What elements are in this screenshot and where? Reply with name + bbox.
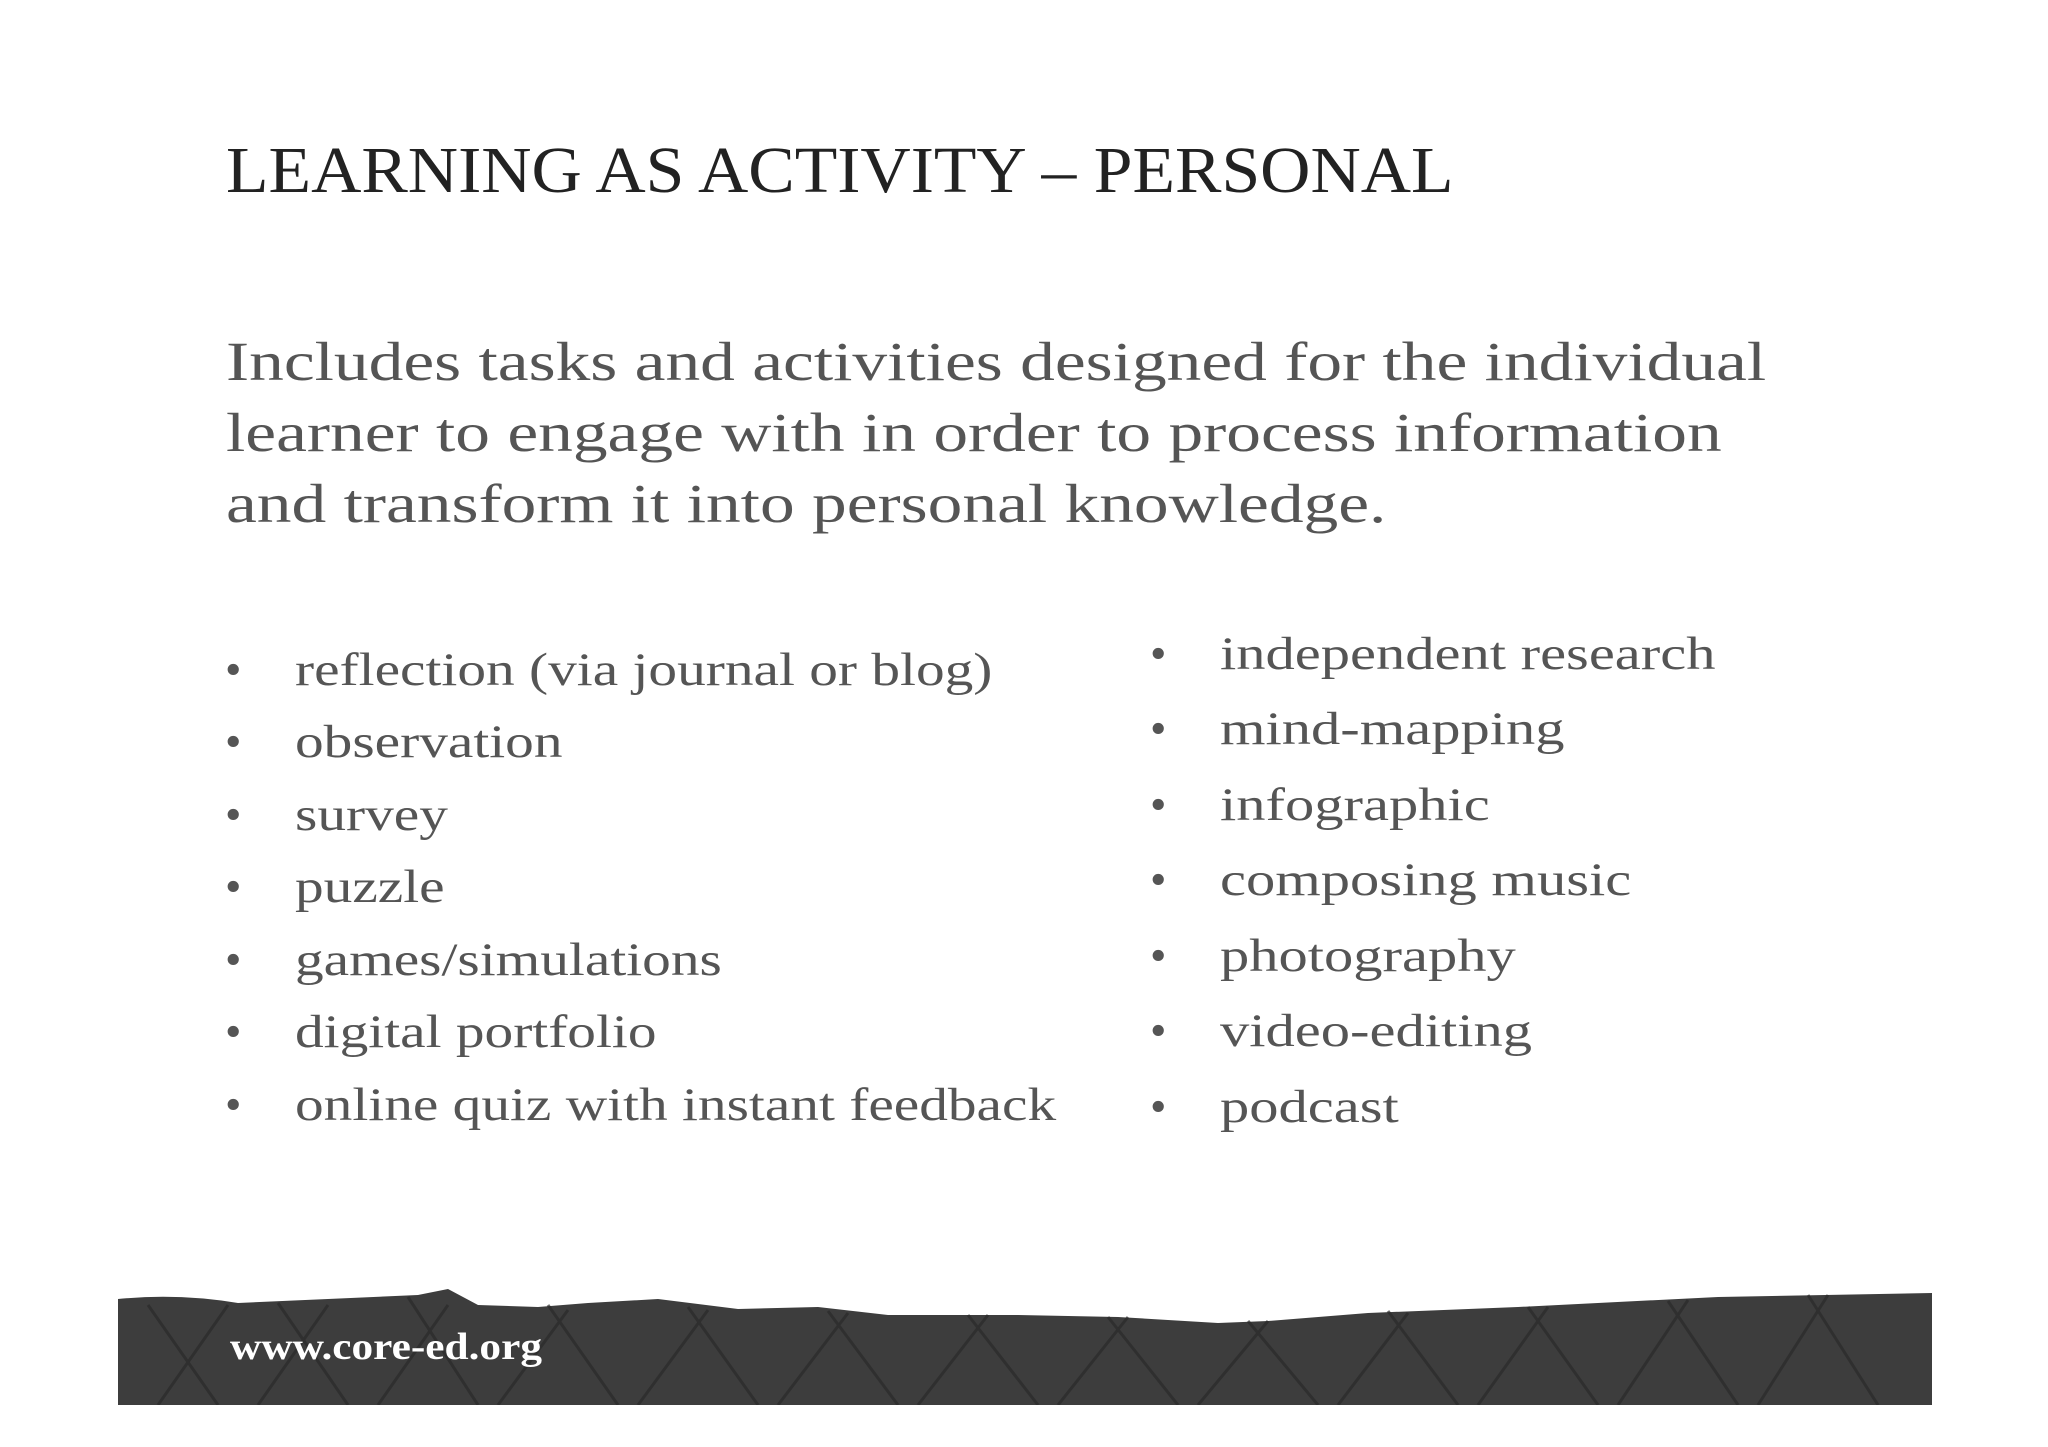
list: right column: • bbox=[1150, 854, 1166, 906]
list: left column: • bbox=[225, 861, 241, 913]
footer band bbox=[118, 1289, 1932, 1405]
intro paragraph: Includes tasks and activities designed for the individual bbox=[226, 331, 1766, 392]
list: right column: composing music bbox=[1220, 854, 1631, 906]
footer url: www.core-ed.org bbox=[230, 1326, 542, 1368]
list: left column bbox=[225, 644, 1056, 1131]
list: left column: games/simulations bbox=[295, 934, 722, 986]
list: left column: puzzle bbox=[295, 861, 445, 913]
list: right column: • bbox=[1150, 628, 1166, 680]
title: LEARNING AS ACTIVITY – PERSONAL bbox=[226, 134, 1454, 207]
list: right column: • bbox=[1150, 930, 1166, 982]
list: left column: • bbox=[225, 1006, 241, 1058]
list: right column: • bbox=[1150, 1081, 1166, 1133]
list: left column: • bbox=[225, 1079, 241, 1131]
list: right column: • bbox=[1150, 779, 1166, 831]
intro paragraph bbox=[226, 331, 1766, 534]
list: right column: • bbox=[1150, 703, 1166, 755]
list: left column: • bbox=[225, 716, 241, 768]
list: right column: photography bbox=[1220, 930, 1516, 982]
list: left column: survey bbox=[295, 789, 448, 841]
list: left column: reflection (via journal or blog) bbox=[295, 644, 992, 696]
intro paragraph: learner to engage with in order to process information bbox=[226, 402, 1722, 463]
list: left column: • bbox=[225, 934, 241, 986]
list: right column: mind-mapping bbox=[1220, 703, 1565, 755]
list: left column: observation bbox=[295, 716, 563, 768]
list: right column: podcast bbox=[1220, 1081, 1399, 1133]
list: left column: online quiz with instant feedback bbox=[295, 1079, 1056, 1131]
list: left column: • bbox=[225, 644, 241, 696]
list: right column: video-editing bbox=[1220, 1005, 1532, 1057]
list: right column bbox=[1150, 628, 1716, 1133]
list: right column: • bbox=[1150, 1005, 1166, 1057]
intro paragraph: and transform it into personal knowledge. bbox=[226, 473, 1386, 534]
list: right column: infographic bbox=[1220, 779, 1490, 831]
list: right column: independent research bbox=[1220, 628, 1716, 680]
list: left column: • bbox=[225, 789, 241, 841]
list: left column: digital portfolio bbox=[295, 1006, 657, 1058]
